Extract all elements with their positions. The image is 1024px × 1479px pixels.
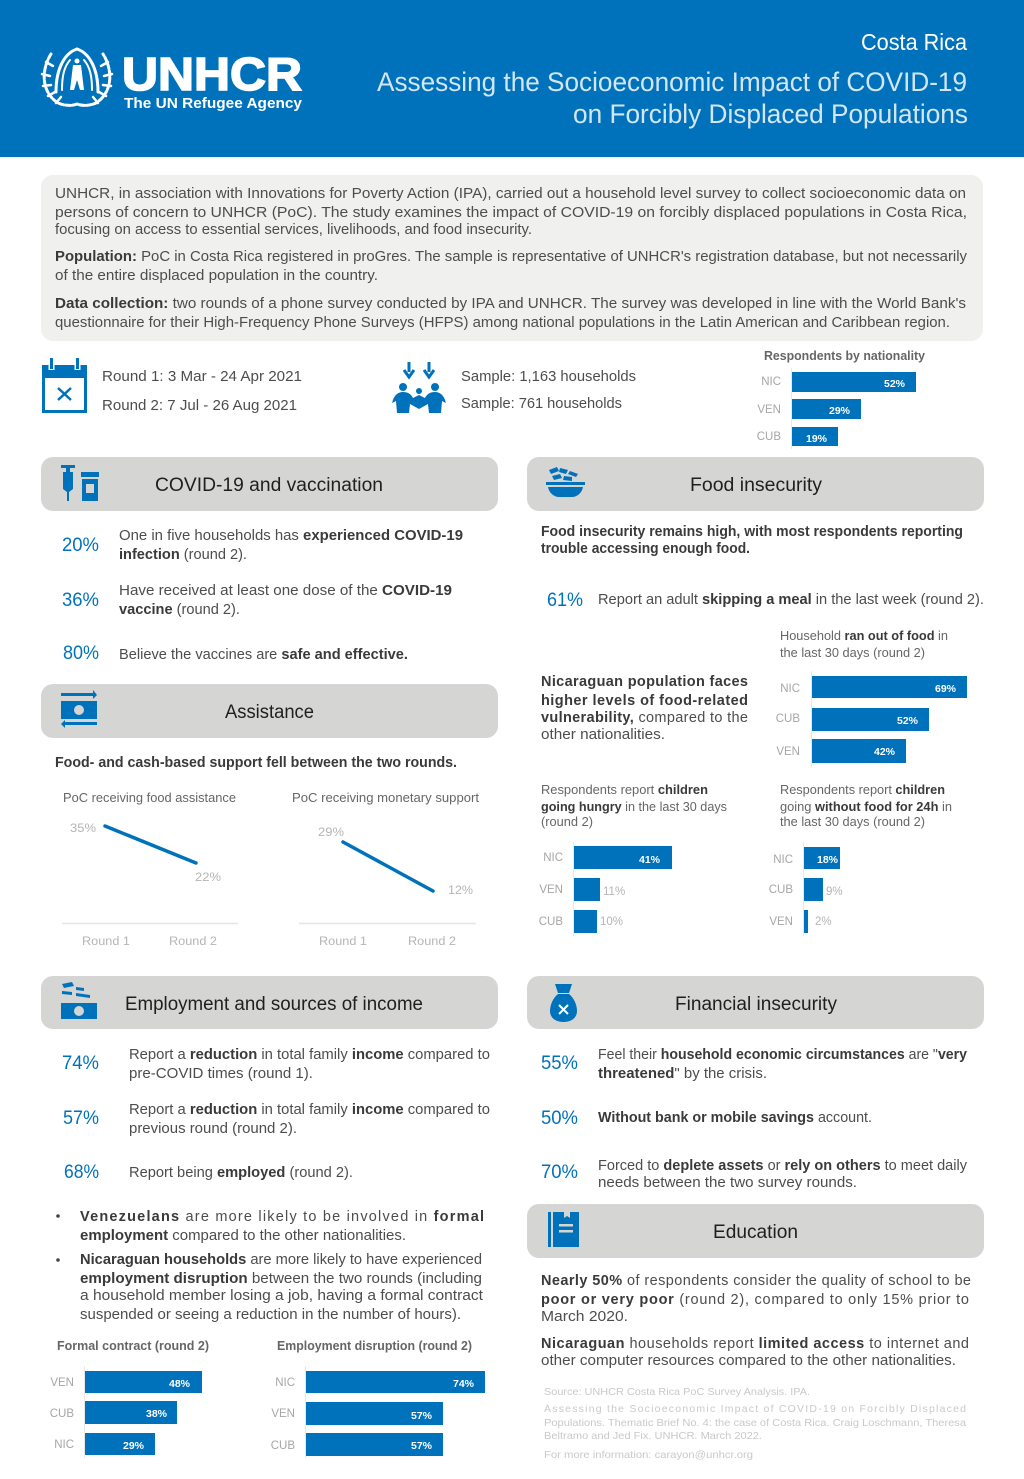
chart: employment disruption: 74% [453,1378,475,1390]
bullet: Nicaraguan households: suspended or seeing a reduction in the number of hours). [80,1307,461,1323]
chart: employment disruption: 57% [411,1410,433,1422]
stat: 80%: 80% [63,643,99,664]
icon: book [548,1212,579,1247]
chart: respondents by nationality: 29% [829,405,851,417]
source note [544,1386,966,1461]
section header: Employment and sources of income [125,994,423,1015]
source note: Populations. Thematic Brief No. 4: the case of Costa Rica. Craig Loschmann, Theresa [544,1417,966,1429]
assistance summary: Food- and cash-based support fell between the two rounds. [55,755,457,771]
chart: children without food 24h: Respondents report children [780,783,945,797]
source note: Source: UNHCR Costa Rica PoC Survey Analysis. IPA. [544,1386,810,1398]
section header [527,1204,984,1258]
stat: 55% [541,1047,967,1082]
source note: Assessing the Socioeconomic Impact of COVID-19 on Forcibly Displaced [544,1403,966,1415]
stat: 57%: Report a reduction in total family income compared to [129,1102,490,1118]
chart: respondents by nationality: VEN [757,404,781,416]
survey round dates: Round 1: 3 Mar - 24 Apr 2021 [102,369,302,385]
bullet: Venezuelans: Venezuelans are more likely to be involved in formal [80,1209,484,1225]
report title: Assessing the Socioeconomic Impact of COVID-19 [377,67,967,97]
chart: ran out of food: 42% [874,746,896,758]
section header: Food insecurity [690,475,823,496]
stat: 70%: Forced to deplete assets or rely on others to meet daily [598,1158,968,1174]
chart: employment disruption: NIC [275,1377,295,1389]
stat: 70%: 70% [541,1162,578,1183]
stat: 57% [63,1102,490,1137]
source note: Beltramo and Jed Fix. UNHCR. March 2022. [544,1430,762,1442]
icon: food bowl [546,467,585,497]
food summary: Food insecurity remains high, with most respondents reporting [541,524,963,540]
chart: ran out of food: 52% [897,715,919,727]
chart: ran out of food: VEN [776,746,800,758]
population text [55,249,968,284]
chart: children without food 24h: CUB [769,884,793,896]
stat: 70% [541,1158,968,1191]
stat: 68%: 68% [64,1162,99,1183]
stat: 68% [64,1162,353,1183]
stat: 68%: Report being employed (round 2). [129,1165,353,1181]
section header: COVID-19 and vaccination [155,475,383,496]
chart: respondents by nationality: 19% [806,433,828,445]
icon: people sample [392,362,446,413]
stat: 74%: 74% [62,1053,99,1074]
chart: ran out of food [776,629,967,767]
stat: 20%: 20% [62,535,99,556]
education text: internet access [541,1336,969,1369]
chart: respondents by nationality: Respondents by nationality [764,349,925,363]
chart: children without food 24h: going without food for 24h in [780,800,952,814]
icon: syringe and vial [61,465,99,501]
bullet: Venezuelans: employment compared to the other nationalities. [80,1228,406,1244]
chart: children going hungry: VEN [539,884,563,896]
nicaraguan vulnerability text [541,674,748,743]
chart: formal contract: 29% [123,1440,145,1452]
chart: formal contract: 38% [146,1408,168,1420]
stat: 61%: Report an adult skipping a meal in the last week (round 2). [598,592,984,608]
chart: monetary support line: 29% [318,827,344,839]
stat: 50% [541,1108,872,1129]
panel: COVID-19 and vaccination [41,457,498,664]
chart: respondents by nationality: CUB [757,431,781,443]
chart: food assistance line [62,791,238,948]
chart: monetary support line: Round 1 [319,936,367,948]
stat: 55%: Feel their household economic circumstances are "very [598,1047,967,1063]
sample sizes: Sample: 761 households [461,396,622,412]
chart: employment disruption [271,1339,485,1458]
chart: monetary support line [292,791,480,948]
bullet: Nicaraguan households: a household member losing a job, having a formal contract [80,1288,483,1304]
section header [527,976,984,1029]
chart: ran out of food: NIC [780,683,800,695]
chart: food assistance line: PoC receiving food assistance [63,791,236,805]
education text: school quality: poor or very poor (round 2), compared to only 15% prior to [541,1292,969,1308]
education text: school quality: Nearly 50% of respondents consider the quality of school to be [541,1273,971,1289]
report title [377,67,968,129]
stat: 20%: One in five households has experienced COVID-19 [119,528,463,544]
stat: 57%: previous round (round 2). [129,1121,297,1137]
chart: formal contract: Formal contract (round 2) [57,1339,209,1353]
stat: 74%: Report a reduction in total family income compared to [129,1047,490,1063]
food summary: trouble accessing enough food. [541,541,750,557]
panel: food insecurity [527,457,984,936]
chart: ran out of food: the last 30 days (round 2) [780,646,925,660]
bullet: Nicaraguan households: employment disruption between the two rounds (including [80,1271,482,1287]
stat: 50%: 50% [541,1108,578,1129]
chart: food assistance line: 35% [70,823,96,835]
population text: Population: PoC in Costa Rica registered in proGres. The sample is representative of UNHCR's registration database, but not necessarily [55,249,968,265]
chart: children going hungry [539,783,727,936]
chart: children without food 24h: 18% [817,854,839,866]
food summary [541,524,963,557]
chart: children going hungry: (round 2) [541,815,593,829]
intro text: persons of concern to UNHCR (PoC). The study examines the impact of COVID-19 on forcibly displaced populations in Costa Rica, [55,205,967,221]
education text: school quality [541,1273,971,1325]
chart: children going hungry: NIC [543,852,563,864]
sample sizes: Sample: 1,163 households [461,369,636,385]
nicaraguan vulnerability text: higher levels of food-related [541,693,748,709]
panel: introduction [41,175,983,341]
chart: children going hungry: 10% [600,916,623,928]
report title: on Forcibly Displaced Populations [573,99,968,129]
chart: employment disruption: 57% [411,1440,433,1452]
nicaraguan vulnerability text: other nationalities. [541,727,665,743]
population text: of the entire displaced population in the country. [55,268,378,284]
chart: formal contract: NIC [54,1439,74,1451]
chart: food assistance line: Round 2 [169,936,217,948]
panel: financial insecurity [527,976,984,1191]
chart: formal contract: CUB [50,1408,74,1420]
chart: employment disruption: VEN [271,1408,295,1420]
chart: children without food 24h: 2% [815,916,832,928]
intro text [55,186,967,238]
section header: Assistance [225,702,314,723]
data collection text [55,296,966,331]
stat: 61%: 61% [547,590,583,611]
section header [41,457,498,511]
country label: Costa Rica [861,29,967,55]
icon: UNHCR emblem [42,49,112,105]
logo wordmark: UNHCR [122,48,302,100]
header banner [0,0,1024,157]
stat: 57%: 57% [63,1108,99,1129]
stat: 36% [62,583,452,618]
stat: 61% [547,590,984,611]
icon: money and coins [61,982,97,1019]
section header [41,976,498,1029]
chart: children without food 24h: 9% [826,886,843,898]
stat: 20%: infection (round 2). [119,547,247,563]
stat: 36%: vaccine (round 2). [119,602,240,618]
stat: 20% [62,528,463,563]
chart: formal contract: VEN [50,1377,74,1389]
chart: children going hungry: CUB [539,916,563,928]
chart: ran out of food: Household ran out of food in [780,629,948,643]
chart: monetary support line: PoC receiving monetary support [292,791,480,805]
intro text: focusing on access to essential services, livelihoods, and food insecurity. [55,222,532,238]
panel: assistance [41,684,498,948]
intro text: UNHCR, in association with Innovations for Poverty Action (IPA), carried out a household level survey to collect socioeconomic data on [55,186,966,202]
chart: monetary support line: 12% [448,885,473,897]
sample sizes [461,369,636,412]
education text: internet access: Nicaraguan households report limited access to internet and [541,1336,969,1352]
stat: 74% [62,1047,490,1082]
chart: formal contract [50,1339,209,1458]
stat: 55%: threatened" by the crisis. [598,1066,767,1082]
chart: ran out of food: CUB [776,713,800,725]
chart: respondents by nationality: 52% [884,378,906,390]
nicaraguan vulnerability text: Nicaraguan population faces [541,674,748,690]
stat: 74%: pre-COVID times (round 1). [129,1066,313,1082]
education text: internet access: other computer resources compared to the other nationalities. [541,1353,956,1369]
stat: 70%: needs between the two survey rounds. [598,1175,857,1191]
section header [527,457,984,511]
section header: Education [713,1222,798,1243]
chart: children without food 24h: the last 30 days (round 2) [780,815,925,829]
stat: 80%: Believe the vaccines are safe and effective. [119,647,408,663]
section header [41,684,498,738]
education text: school quality: March 2020. [541,1309,628,1325]
bullet: Nicaraguan households [56,1252,483,1323]
section header: Financial insecurity [675,994,837,1015]
panel: education [527,1204,984,1461]
bullet: Venezuelans [56,1209,484,1244]
stat: 36%: Have received at least one dose of the COVID-19 [119,583,452,599]
chart: children without food 24h: NIC [773,854,793,866]
chart: children without food 24h: VEN [769,916,793,928]
chart: respondents by nationality [757,349,925,449]
survey round dates [102,369,302,414]
chart: children going hungry: 11% [603,886,625,898]
chart: formal contract: 48% [169,1378,191,1390]
chart: ran out of food: 69% [935,683,957,695]
chart: children going hungry: Respondents report children [541,783,708,797]
chart: food assistance line: 22% [195,872,221,884]
chart: monetary support line: Round 2 [408,936,456,948]
chart: children going hungry: going hungry in the last 30 days [541,800,727,814]
chart: employment disruption: Employment disruption (round 2) [277,1339,472,1353]
stat: 80% [63,643,408,664]
chart: children going hungry: 41% [639,854,661,866]
stat: 55%: 55% [541,1053,578,1074]
data collection text: questionnaire for their High-Frequency Phone Surveys (HFPS) among national populations in the Latin American and Caribbean region. [55,315,950,331]
nicaraguan vulnerability text: vulnerability, compared to the [541,710,748,726]
stat: 50%: Without bank or mobile savings account. [598,1110,872,1126]
chart: respondents by nationality: NIC [761,376,781,388]
icon: calendar [42,358,87,413]
chart: children without food 24h [769,783,952,936]
source note: For more information: carayon@unhcr.org [544,1449,753,1461]
panel: employment and sources of income [41,976,498,1458]
stat: 36%: 36% [62,590,99,611]
icon: cash transfer [61,690,97,728]
logo wordmark: The UN Refugee Agency [124,95,303,112]
icon: money bag [550,984,577,1022]
chart: food assistance line: Round 1 [82,936,130,948]
bullet: Nicaraguan households: Nicaraguan households are more likely to have experienced [80,1252,482,1268]
data collection text: Data collection: two rounds of a phone survey conducted by IPA and UNHCR. The survey was developed in line with the World Bank's [55,296,966,312]
survey round dates: Round 2: 7 Jul - 26 Aug 2021 [102,398,297,414]
chart: employment disruption: CUB [271,1440,295,1452]
